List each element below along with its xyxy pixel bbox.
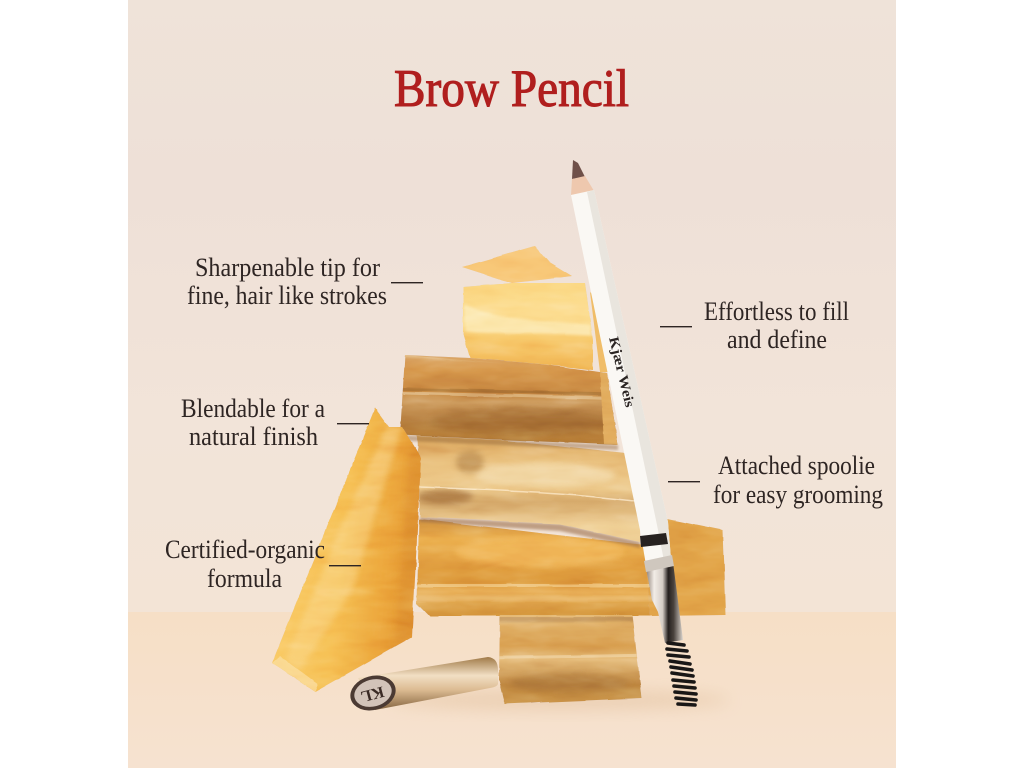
wax sliver behind pencil [590,292,612,372]
callout: blendable: Blendable for a [181,394,325,423]
callout: effortless: and define [727,325,827,354]
callout: certified organic: Certified-organic [165,535,325,564]
callout: effortless: Effortless to fill [704,297,849,326]
spoolie brush [667,643,696,705]
shadow under brown block [400,435,618,450]
shadow under cream block [420,517,640,548]
callout: sharpenable tip [187,253,423,310]
product photo: wax stack and pencil [272,160,730,715]
metallic pencil cap: KL [359,682,386,705]
wax flake on top [462,246,572,283]
callout: certified organic: formula [207,564,282,593]
wax wedge leaning left [272,408,422,692]
callout: blendable [181,394,369,451]
callout: spoolie [668,451,883,509]
wax block: brown [400,355,618,445]
wax block: back right of gold block [640,518,726,616]
callout: sharpenable tip: Sharpenable tip for [195,253,380,282]
wax block: golden [415,519,655,616]
callout: spoolie: for easy grooming [713,480,883,509]
wax block: pale yellow [463,283,593,370]
callout: sharpenable tip: fine, hair like strokes [187,281,387,310]
pencil wood [571,176,594,195]
wax block: bottom [498,615,644,704]
metal ferrule [646,562,683,643]
callout: certified organic [165,535,361,593]
black band [640,533,668,547]
pencil body [571,190,671,565]
callout: blendable: natural finish [189,422,318,451]
pencil brand text: Kjær Weis [605,335,637,410]
pencil lead tip [572,160,585,179]
callout: effortless [660,297,849,354]
floor shadow [390,690,730,710]
brow pencil [571,160,696,705]
title: Brow Pencil [394,60,629,118]
callout: spoolie: Attached spoolie [718,451,875,480]
metallic pencil cap [346,657,498,715]
wax block: cream [417,436,642,542]
